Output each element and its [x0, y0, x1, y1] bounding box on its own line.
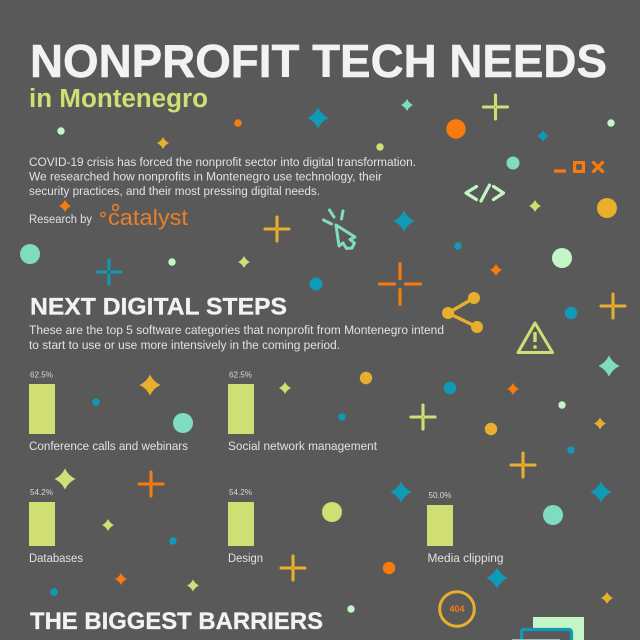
section description: These are the top 5 software categories that nonprofit from Montenegro intend	[29, 323, 444, 337]
bar: design: Design	[228, 551, 263, 565]
heading: the biggest barriers: THE BIGGEST BARRIERS	[30, 608, 323, 635]
decorative crosshair plus marks	[97, 95, 625, 580]
subtitle: in Montenegro	[29, 85, 208, 113]
section description: to start to use or use more intensively in the coming period.	[29, 338, 340, 352]
bar: design: 54.2%	[229, 487, 252, 497]
bar: media clipping	[427, 490, 504, 565]
bar: media clipping: Media clipping	[428, 551, 504, 565]
icon: share nodes	[442, 292, 483, 333]
bar: databases: 54.2%	[30, 487, 53, 497]
research credit with catalyst logo	[29, 204, 188, 230]
icon: code brackets	[466, 185, 504, 201]
icon: 404 error badge	[440, 592, 474, 626]
bar: conference calls and webinars	[29, 370, 188, 453]
decorative dots	[20, 119, 617, 613]
bar: databases: Databases	[29, 551, 83, 565]
bar: media clipping: 50.0%	[428, 490, 452, 500]
icon: 404 error badge: 404	[449, 604, 465, 614]
intro paragraph: COVID-19 crisis has forced the nonprofit sector into digital transformation.	[29, 155, 416, 169]
icon: warning triangle	[518, 323, 552, 352]
section description	[29, 323, 444, 352]
decorative four-point stars	[54, 99, 620, 604]
intro paragraph	[29, 155, 416, 198]
bar: social network management: Social network management	[228, 439, 378, 453]
bar: social network management	[228, 370, 378, 453]
heading: next digital steps: NEXT DIGITAL STEPS	[30, 294, 287, 320]
icon: window controls	[554, 162, 604, 172]
bar: databases	[29, 487, 83, 565]
bar: conference calls and webinars: 62.5%	[30, 370, 53, 380]
bar: conference calls and webinars: Conference calls and webinars	[29, 439, 188, 453]
research credit with catalyst logo: catalyst	[108, 205, 188, 230]
research credit with catalyst logo: Research by	[29, 212, 93, 226]
icon: overlapping browser windows	[512, 617, 584, 640]
bar: design	[228, 487, 263, 565]
icon: clicking cursor	[324, 210, 355, 248]
bar: social network management: 62.5%	[229, 370, 252, 380]
intro paragraph: security practices, and their most pressing digital needs.	[29, 184, 320, 198]
bar chart: software categories	[29, 370, 504, 565]
title: NONPROFIT TECH NEEDS	[30, 35, 607, 87]
intro paragraph: We researched how nonprofits in Montenegro use technology, their	[29, 170, 382, 184]
